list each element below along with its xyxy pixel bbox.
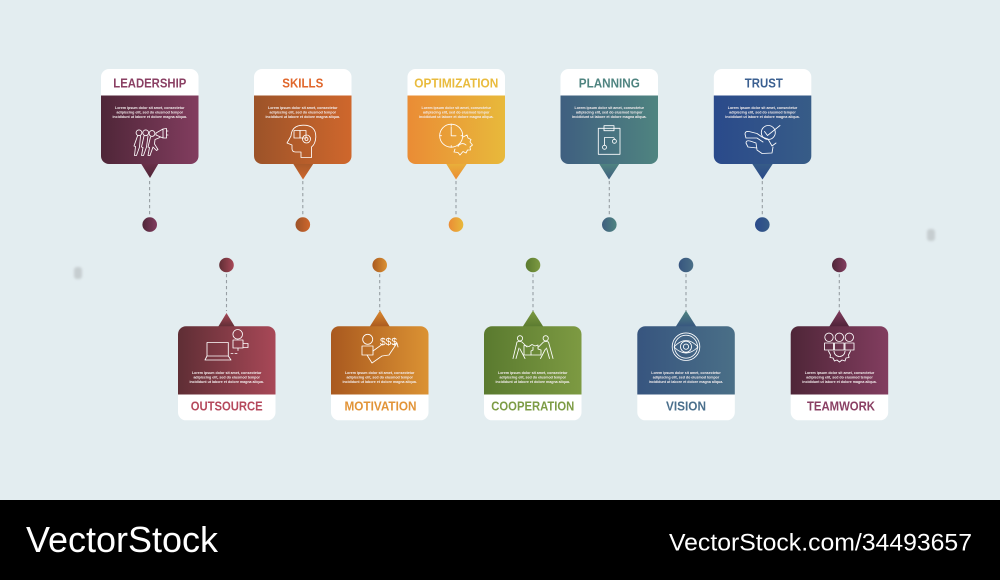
panel: optimization [408, 69, 505, 216]
panel: motivation [331, 274, 428, 420]
planning pointer and connector [599, 164, 620, 216]
dot: motivation [372, 258, 387, 272]
panel: vision [637, 274, 735, 420]
motivation description: adipiscing elit, sed do eiusmod tempor [346, 375, 414, 379]
leadership description: Lorem ipsum dolor sit amet, consectetur [115, 106, 185, 110]
vision description: adipiscing elit, sed do eiusmod tempor [653, 375, 720, 379]
cooperation description: Lorem ipsum dolor sit amet, consectetur [498, 371, 568, 375]
optimization pointer and connector [446, 164, 467, 216]
leadership header [101, 69, 198, 96]
skills description: Lorem ipsum dolor sit amet, consectetur [268, 106, 338, 110]
icon: eye in circle [672, 333, 700, 361]
trust header [714, 69, 811, 96]
dot: skills [296, 217, 310, 232]
trust description: adipiscing elit, sed do eiusmod tempor [729, 111, 796, 115]
cooperation footer [484, 394, 582, 420]
vision footer [637, 394, 735, 420]
outsource description: adipiscing elit, sed do eiusmod tempor [193, 375, 261, 379]
cooperation title: COOPERATION [491, 398, 574, 414]
panel: planning [560, 69, 658, 216]
teamwork title: TEAMWORK [807, 398, 876, 414]
panel: teamwork [791, 274, 888, 420]
trust description: incididunt ut labore et dolore magna aliqua. [725, 115, 800, 119]
cooperation body [484, 326, 582, 394]
panel: cooperation [484, 274, 582, 420]
icon: head with book and gear [287, 125, 316, 158]
outsource body [178, 326, 276, 394]
dot: teamwork [832, 258, 847, 272]
dot: vision [679, 258, 693, 272]
skills header [254, 69, 352, 96]
smudge left [74, 267, 82, 279]
teamwork footer [791, 394, 888, 420]
skills body [254, 96, 352, 164]
icon: man with rising money arrow [362, 334, 398, 363]
motivation footer [331, 394, 428, 420]
motivation pointer and connector [370, 274, 390, 327]
footer brand: VectorStock [26, 519, 219, 560]
planning header [560, 69, 658, 96]
planning description: Lorem ipsum dolor sit amet, consectetur [575, 106, 645, 110]
motivation description: Lorem ipsum dolor sit amet, consectetur [345, 371, 415, 375]
icon: three people and gear [824, 333, 854, 362]
dot: outsource [219, 258, 234, 272]
optimization body [408, 96, 505, 164]
dot: cooperation [526, 258, 540, 272]
footer image id: VectorStock.com/34493657 [669, 530, 972, 556]
skills description: incididunt ut labore et dolore magna aliqua. [266, 115, 340, 119]
dot: optimization [449, 217, 463, 232]
icon: people with megaphone [134, 128, 168, 156]
motivation title: MOTIVATION [344, 398, 416, 414]
smudge right [927, 229, 935, 241]
teamwork description: incididunt ut labore et dolore magna aliqua. [802, 380, 877, 384]
outsource title: OUTSOURCE [191, 398, 263, 414]
icon: two people with puzzle [513, 336, 553, 358]
cooperation pointer and connector [522, 274, 544, 327]
planning title: PLANNING [579, 75, 640, 90]
icon: clipboard with plan [598, 126, 620, 154]
footer bar [0, 500, 1000, 580]
outsource description: Lorem ipsum dolor sit amet, consectetur [192, 371, 262, 375]
cooperation description: adipiscing elit, sed do eiusmod tempor [500, 375, 567, 379]
dot: planning [602, 217, 617, 232]
skills description: adipiscing elit, sed do eiusmod tempor [270, 111, 337, 115]
dot: leadership [142, 217, 157, 232]
planning body [560, 96, 658, 164]
cooperation description: incididunt ut labore et dolore magna aliqua. [496, 380, 570, 384]
panel: outsource [178, 274, 276, 420]
trust title: TRUST [745, 75, 783, 90]
teamwork pointer and connector [829, 274, 850, 327]
dot: trust [755, 217, 770, 232]
teamwork description: adipiscing elit, sed do eiusmod tempor [806, 375, 873, 379]
teamwork description: Lorem ipsum dolor sit amet, consectetur [805, 371, 875, 375]
panel: skills [254, 69, 352, 216]
panel: trust [714, 69, 811, 216]
icon: handshake with check [745, 126, 780, 154]
optimization title: OPTIMIZATION [414, 75, 498, 90]
leadership description: incididunt ut labore et dolore magna aliqua. [113, 115, 187, 119]
vision title: VISION [666, 398, 706, 414]
optimization description: Lorem ipsum dolor sit amet, consectetur [422, 106, 492, 110]
icon: man with rising money arrow: $$$ [380, 337, 397, 348]
leadership pointer and connector [141, 164, 158, 216]
optimization description: adipiscing elit, sed do eiusmod tempor [423, 111, 490, 115]
trust description: Lorem ipsum dolor sit amet, consectetur [728, 106, 798, 110]
planning description: incididunt ut labore et dolore magna aliqua. [572, 115, 647, 119]
motivation description: incididunt ut labore et dolore magna aliqua. [342, 380, 417, 384]
motivation body [331, 326, 428, 394]
vision pointer and connector [676, 274, 696, 327]
leadership body [101, 96, 198, 164]
skills pointer and connector [293, 164, 314, 216]
outsource description: incididunt ut labore et dolore magna aliqua. [189, 380, 264, 384]
skills title: SKILLS [282, 75, 324, 90]
optimization description: incididunt ut labore et dolore magna aliqua. [419, 115, 494, 119]
leadership description: adipiscing elit, sed do eiusmod tempor [117, 111, 184, 115]
teamwork body [791, 326, 888, 394]
optimization header [408, 69, 505, 96]
outsource footer [178, 394, 276, 420]
vision description: incididunt ut labore et dolore magna aliqua. [649, 380, 723, 384]
panel: leadership [101, 69, 198, 216]
trust pointer and connector [752, 164, 773, 216]
outsource pointer and connector [218, 274, 235, 327]
trust body [714, 96, 811, 164]
vision description: Lorem ipsum dolor sit amet, consectetur [651, 371, 721, 375]
vision body [637, 326, 735, 394]
icon: clock and gear [440, 124, 472, 155]
planning description: adipiscing elit, sed do eiusmod tempor [576, 111, 643, 115]
leadership title: LEADERSHIP [113, 75, 187, 90]
icon: laptop and person [205, 330, 248, 360]
